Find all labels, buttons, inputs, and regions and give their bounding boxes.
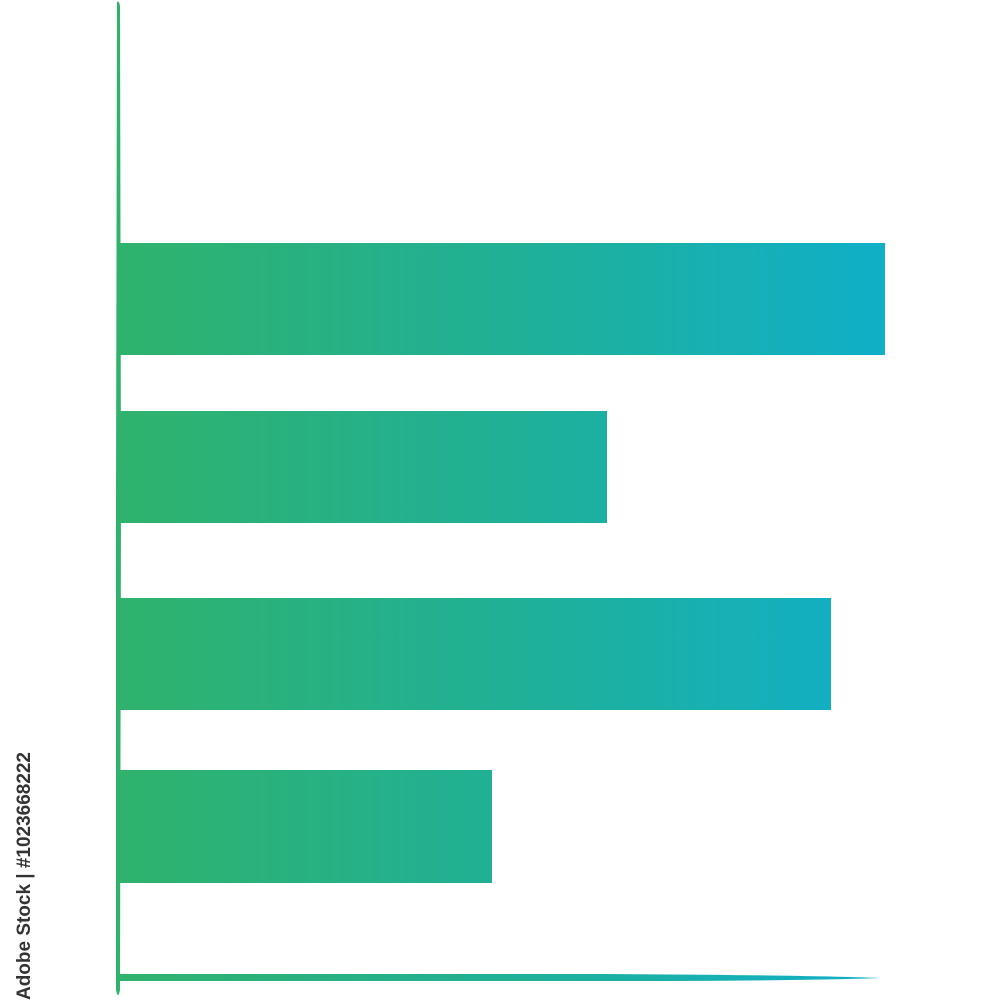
- watermark text: Adobe Stock | #1023668222: [13, 752, 35, 1000]
- x axis: [118, 974, 880, 981]
- bar 4: [118, 770, 492, 883]
- bar 3: [118, 598, 831, 710]
- bar 1: [118, 243, 885, 355]
- bar 2: [118, 411, 607, 523]
- y axis: [116, 2, 121, 995]
